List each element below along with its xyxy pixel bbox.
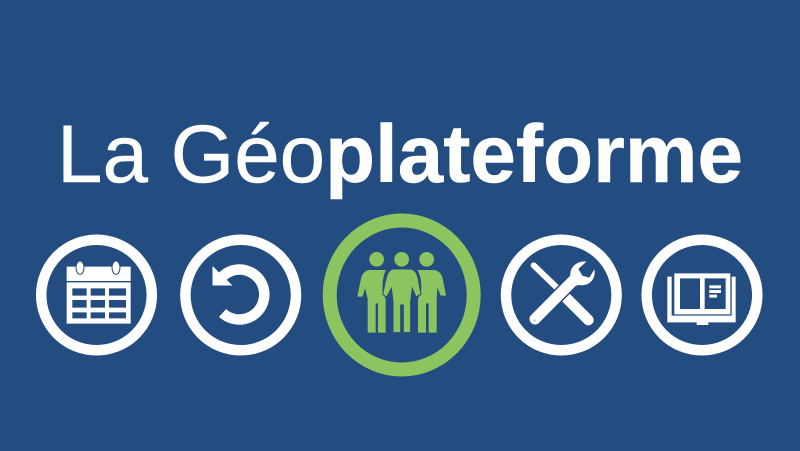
icon: undo arrow in white ring bbox=[185, 240, 296, 350]
icon: three people in green ring bbox=[330, 220, 474, 370]
icon: open book in white ring bbox=[647, 240, 757, 350]
icon: calendar in white ring bbox=[41, 240, 152, 350]
title: La Géoplateforme bbox=[57, 109, 743, 200]
icon: wrench and screwdriver in white ring bbox=[506, 240, 617, 350]
